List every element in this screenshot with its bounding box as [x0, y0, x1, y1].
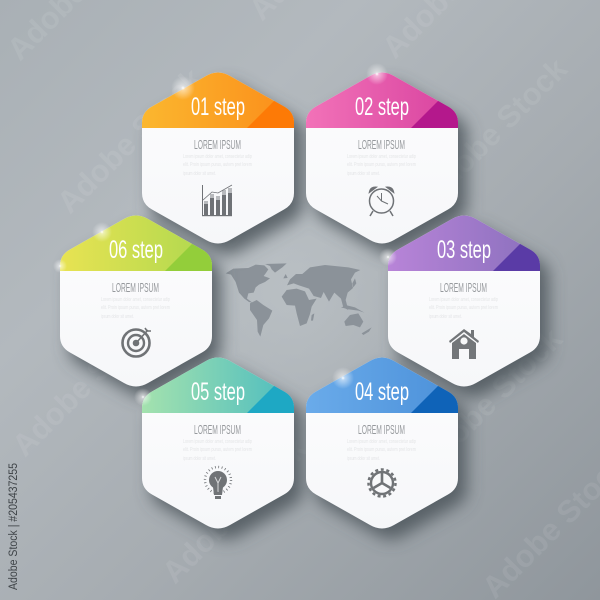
icon: light bulb [205, 467, 231, 499]
background glow [90, 90, 490, 490]
icon: bar chart [202, 185, 232, 216]
panel: step 01 [142, 67, 297, 244]
card body [142, 72, 294, 244]
body text: elit. Proin ipsum purus, autem pret lorem [183, 162, 252, 168]
watermarks: Adobe Stock [5, 304, 164, 463]
coloured header [142, 72, 294, 128]
watermarks: Adobe Stock [155, 431, 314, 590]
card body [306, 72, 458, 244]
body text [429, 297, 498, 320]
step title: 02 step [355, 93, 409, 121]
coloured header [388, 216, 540, 271]
body text [347, 439, 416, 462]
panel: step 02 [306, 67, 461, 244]
coloured header [60, 216, 212, 271]
icon: alarm clock [369, 187, 394, 216]
body text [183, 439, 252, 462]
body text: ipsum dolor sit amet. [183, 456, 216, 462]
panel: step 04 [306, 352, 461, 528]
coloured header [142, 358, 294, 413]
step title: 06 step [109, 236, 163, 264]
step title: 04 step [355, 378, 409, 406]
body text: ipsum dolor sit amet. [429, 314, 462, 320]
body text: elit. Proin ipsum purus, autem pret lorem [429, 305, 498, 311]
body text: elit. Proin ipsum purus, autem pret lorem [347, 162, 416, 168]
step title: 05 step [191, 378, 245, 406]
body text: ipsum dolor sit amet. [347, 171, 380, 177]
body text: elit. Proin ipsum purus, autem pret lorem [347, 447, 416, 453]
body text: elit. Proin ipsum purus, autem pret lorem [101, 305, 170, 311]
body text: ipsum dolor sit amet. [347, 456, 380, 462]
body text: Lorem ipsum dolor amet, consectetur adip [101, 297, 170, 303]
card shadows [69, 84, 549, 540]
body text: elit. Proin ipsum purus, autem pret lorem [183, 447, 252, 453]
body text: Lorem ipsum dolor amet, consectetur adip [347, 154, 416, 160]
watermarks: Stock [210, 170, 295, 255]
panel: step 05 [142, 352, 297, 528]
world map [226, 263, 372, 337]
watermarks: Adobe Stock [415, 51, 574, 210]
sparkles [53, 63, 397, 406]
body text: Lorem ipsum dolor amet, consectetur adip [347, 439, 416, 445]
heading: LOREM IPSUM [194, 423, 241, 437]
body text: Lorem ipsum dolor amet, consectetur adip [429, 297, 498, 303]
heading: LOREM IPSUM [194, 138, 241, 152]
icon: target [122, 328, 151, 356]
card body [60, 216, 212, 386]
icon: house [449, 329, 479, 359]
step title: 01 step [191, 93, 245, 121]
heading: LOREM IPSUM [112, 281, 159, 295]
panel: step 03 [388, 210, 543, 386]
icon: gear [368, 470, 396, 496]
body text [347, 154, 416, 177]
stock id label: Adobe Stock | #205437255 [8, 463, 20, 590]
watermarks: Adobe Stock [50, 61, 209, 220]
panel: step 06 [60, 210, 215, 386]
heading: LOREM IPSUM [358, 423, 405, 437]
body text: Lorem ipsum dolor amet, consectetur adip [183, 439, 252, 445]
coloured header [306, 358, 458, 413]
body text: ipsum dolor sit amet. [101, 314, 134, 320]
body text [183, 154, 252, 177]
card body [388, 216, 540, 386]
heading: LOREM IPSUM [358, 138, 405, 152]
card body [142, 358, 294, 528]
heading: LOREM IPSUM [440, 281, 487, 295]
step title: 03 step [437, 236, 491, 264]
body text: Lorem ipsum dolor amet, consectetur adip [183, 154, 252, 160]
body text [101, 297, 170, 320]
body text: ipsum dolor sit amet. [183, 171, 216, 177]
coloured header [306, 72, 458, 128]
card body [306, 358, 458, 528]
watermarks: Adobe Stock [410, 321, 569, 480]
